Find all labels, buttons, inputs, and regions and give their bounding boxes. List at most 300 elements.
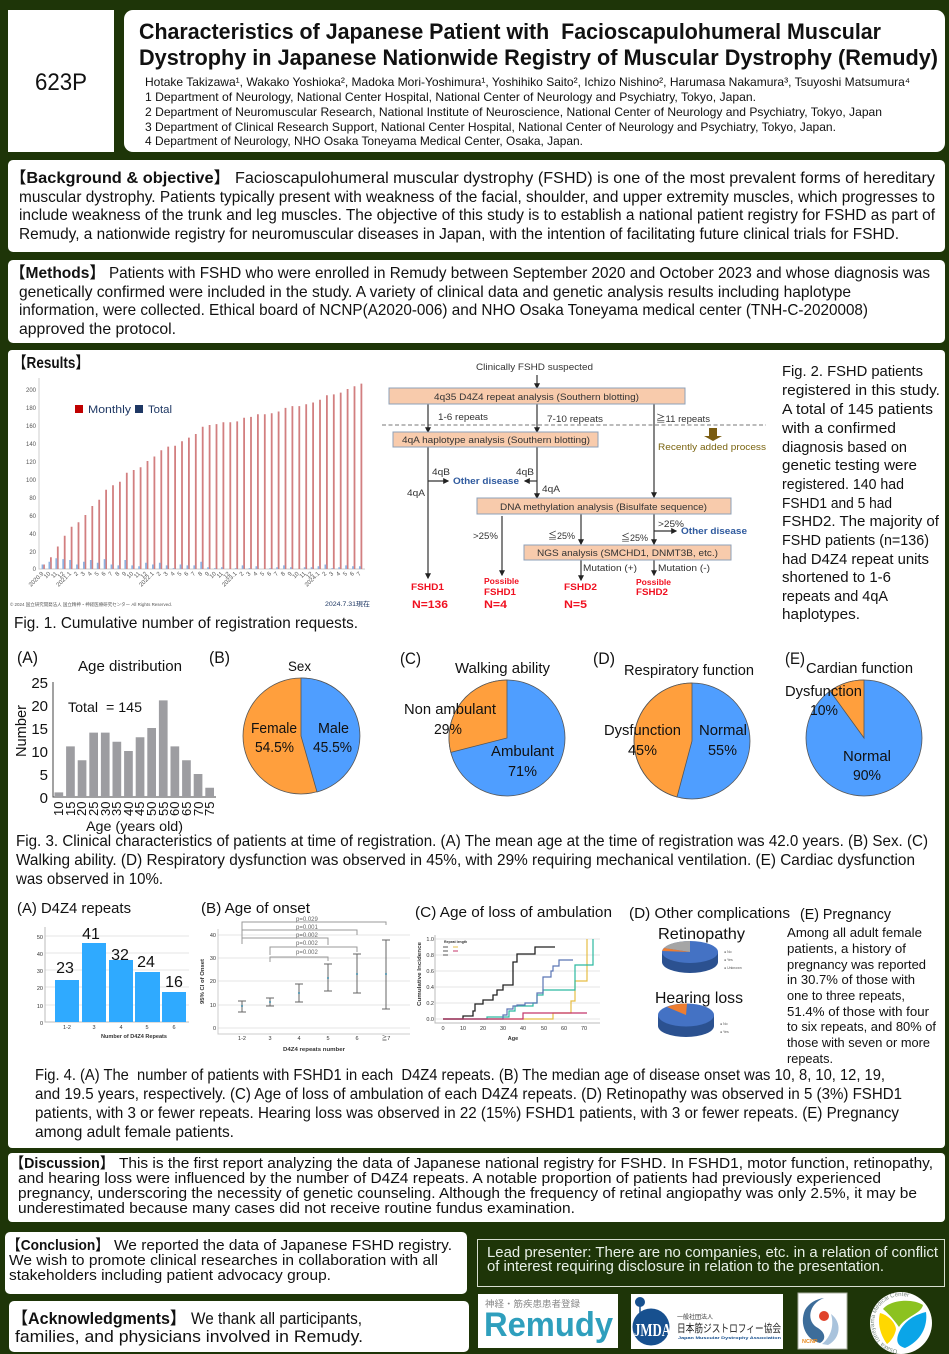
flowchart: diagnosis: 4qB [516, 467, 534, 478]
fig 3D: respiratory function pie: 55% [708, 742, 737, 759]
fig 4B: age of onset error bars: p=0.002 [296, 941, 319, 947]
figure 2 caption: FSHD patients (n=136) [782, 532, 929, 549]
figure 2 caption: A total of 145 patients [782, 401, 933, 418]
fig 4C: loss of ambulation curves: 0.4 [426, 985, 434, 991]
fig 4C: loss of ambulation curves: 40 [520, 1026, 526, 1032]
fig 4B: age of onset error bars: 6 [355, 1036, 359, 1042]
fig 4E: pregnancy text: repeats. [787, 1051, 833, 1066]
fig 4B: age of onset error bars: 10 [210, 1003, 216, 1009]
fig 3A: age distribution: 55 [156, 802, 171, 816]
panel: discussion: This is the first report analyzing the data of Japanese national registry for FSHD. In FSHD1, motor function, retinopathy, [119, 1155, 933, 1172]
fig 3A: age distribution [13, 648, 217, 834]
figure 4 caption: among adult female patients. [35, 1124, 234, 1141]
fig 4B: age of onset error bars: 1-2 [238, 1036, 246, 1042]
title: Dystrophy in Japanese Nationwide Registry of Muscular Dystrophy (Remudy) [139, 45, 938, 70]
fig 3E: cardiac function pie: 90% [853, 767, 881, 784]
fig 4D: other complications: (D) Other complications [629, 905, 790, 922]
flowchart: diagnosis: ≦25% [621, 532, 649, 544]
fig 3A: age distribution: 25 [86, 802, 101, 816]
fig 4B: age of onset error bars [200, 900, 410, 1053]
fig 4B: age of onset error bars: 30 [210, 956, 216, 962]
flowchart: diagnosis: ≦25% [548, 530, 576, 542]
fig 4E: pregnancy text: in 30.7% of those with [787, 972, 915, 987]
retinopathy 3D pie: Retinopathy [658, 926, 745, 943]
figure 4 caption: patients, with 3 or fewer repeats. Hearing loss was observed in 22 (15%) FSHD1 patients, with 3 or fewer repeats. (E) Pregnancy [35, 1105, 899, 1122]
panel: conflict of interest: Lead presenter: There are no companies, etc. in a relation of conflict [487, 1244, 939, 1261]
panel: conflict of interest [478, 1240, 944, 1286]
chart: cumulative registrations: 2 [322, 571, 329, 578]
chart: cumulative registrations: 3 [246, 571, 253, 578]
affiliations: 1 Department of Neurology, National Center Hospital, National Center of Neurology and Psychiatry, Tokyo, Japan. [145, 90, 756, 104]
hearing loss 3D pie: Hearing loss [655, 990, 743, 1007]
chart: cumulative registrations: 5 [260, 571, 267, 578]
fig 3A: age distribution: 0 [40, 790, 48, 807]
panel: conclusion [5, 1232, 467, 1294]
fig 3D: respiratory function pie [593, 649, 754, 799]
fig 4E: pregnancy text: those with seven or more [787, 1035, 930, 1050]
panel: acknowledgments: families, and physicians involved in Remudy. [15, 1327, 363, 1346]
flowchart: diagnosis: >25% [473, 531, 499, 542]
fig 3B: sex pie: 54.5% [255, 739, 294, 756]
panel: conclusion: 【Conclusion】 [7, 1237, 109, 1254]
logo: Osaka Toneyama Medical Center: Osaka Toneyama Medical Center [870, 1292, 910, 1354]
flowchart: diagnosis [382, 362, 766, 611]
fig 3A: age distribution: 50 [144, 802, 159, 816]
chart: cumulative registrations: 8 [115, 571, 122, 578]
fig 4A: D4Z4 repeats bar chart [17, 900, 189, 1040]
logo: Remudy: 神経・筋疾患患者登録 [485, 1298, 580, 1309]
chart: cumulative registrations: 20 [29, 550, 37, 556]
fig 3A: age distribution: 25 [31, 675, 48, 692]
flowchart: diagnosis: Other disease [681, 526, 747, 537]
figure 2 caption: FSHD2. The majority of [782, 513, 940, 530]
fig 3B: sex pie: (B) [209, 648, 230, 667]
fig 3A: age distribution: (A) [17, 648, 38, 667]
fig 4C: loss of ambulation curves: 1.0 [426, 937, 434, 943]
figure 2 caption: diagnosis based on [782, 439, 907, 456]
figure 2 caption: with a confirmed [781, 420, 896, 437]
logo: Osaka Toneyama Medical Center [870, 1292, 932, 1354]
chart: cumulative registrations: 5 [177, 571, 184, 578]
panel: methods: 【Methods】 [10, 264, 105, 282]
flowchart: diagnosis: FSHD2 [636, 587, 668, 598]
fig 3A: age distribution: 10 [31, 744, 48, 761]
fig 3E: cardiac function pie [785, 649, 922, 796]
chart: cumulative registrations: 12 [57, 571, 67, 580]
retinopathy 3D pie: ● No [724, 950, 732, 954]
fig 4C: loss of ambulation curves [415, 904, 612, 1042]
flowchart: diagnosis: Mutation (-) [658, 563, 710, 574]
legend: Total [148, 404, 172, 416]
chart: cumulative registrations: 4 [87, 571, 94, 578]
fig 4C: loss of ambulation curves: 50 [541, 1026, 547, 1032]
fig 3D: respiratory function pie: Dysfunction [604, 722, 681, 739]
logo: JMDA [631, 1294, 783, 1349]
fig 3B: sex pie: Female [251, 720, 297, 737]
panel: acknowledgments: We thank all participants, [191, 1309, 362, 1328]
logo: JMDA: 一般社団法人 [677, 1313, 713, 1321]
panel: discussion [8, 1153, 945, 1222]
figure 2 caption: repeats and 4qA [782, 588, 888, 605]
fig 4B: age of onset error bars: 5 [326, 1036, 330, 1042]
fig 4A: D4Z4 repeats bar chart: 23 [56, 960, 74, 977]
fig 4A: D4Z4 repeats bar chart: 50 [37, 935, 43, 941]
chart: cumulative registrations: 40 [29, 532, 37, 538]
figure 2 caption: FSHD1 and 5 had [782, 495, 892, 512]
chart: cumulative registrations: 2 [239, 571, 246, 578]
fig 3B: sex pie [209, 648, 360, 794]
hearing loss 3D pie: ● Yes [720, 1030, 729, 1034]
fig 4B: age of onset error bars: 3 [268, 1036, 272, 1042]
fig 4E: pregnancy text: patients, a history of [787, 941, 906, 956]
affiliations: 3 Department of Clinical Research Support, National Center Hospital, National Center of Neurology and Psychiatry, Tokyo, Japan. [145, 120, 836, 134]
fig 3B: sex pie: 45.5% [313, 739, 352, 756]
fig 3E: cardiac function pie: (E) [785, 649, 805, 668]
fig 4A: D4Z4 repeats bar chart: 20 [37, 986, 43, 992]
flowchart: diagnosis: 4qB [432, 467, 450, 478]
fig 3C: walking ability pie: Walking ability [455, 660, 550, 677]
flowchart: diagnosis: N=5 [564, 599, 587, 611]
retinopathy 3D pie [658, 926, 745, 973]
chart: cumulative registrations: 11 [51, 571, 60, 580]
chart: cumulative registrations: 2024.1 [304, 571, 322, 588]
panel: background and objective: 【Background & objective】 [10, 169, 230, 187]
fig 3A: age distribution: 45 [132, 802, 147, 816]
figure 4 caption [35, 1067, 902, 1141]
flowchart: diagnosis: FSHD2 [564, 582, 597, 593]
affiliations [145, 90, 882, 148]
flowchart: diagnosis: FSHD1 [411, 582, 445, 593]
chart: cumulative registrations: 100 [26, 478, 37, 484]
fig 3D: respiratory function pie: Respiratory function [624, 662, 754, 679]
chart: cumulative registrations: 2020.9 [28, 571, 46, 588]
panel: background and objective: Facioscapulohumeral muscular dystrophy (FSHD) is one of the most prevalent forms of hereditary [235, 170, 935, 187]
box: methylation analysis: DNA methylation analysis (Bisulfate sequence) [500, 502, 707, 513]
fig 3A: age distribution: Total = 145 [68, 699, 142, 715]
fig 3A: age distribution: 75 [202, 802, 217, 816]
fig 4A: D4Z4 repeats bar chart: 0 [40, 1021, 43, 1027]
chart: cumulative registrations: 8 [280, 571, 287, 578]
fig 4B: age of onset error bars: p=0.001 [296, 925, 319, 931]
fig 4C: loss of ambulation curves: 0.2 [426, 1001, 434, 1007]
fig 4B: age of onset error bars: 0 [213, 1026, 216, 1032]
fig 3A: age distribution: 60 [167, 802, 182, 816]
fig 4E: pregnancy text: pregnancy was reported [787, 957, 926, 972]
chart: cumulative registrations: 2022.1 [139, 571, 156, 588]
figure 2 caption: genetic testing were [782, 457, 917, 474]
flowchart: diagnosis: N=4 [484, 599, 508, 611]
fig 4A: D4Z4 repeats bar chart: Number of D4Z4 Repeats [101, 1034, 167, 1040]
fig 4B: age of onset error bars: p=0.002 [296, 950, 319, 956]
fig 4A: D4Z4 repeats bar chart: 40 [37, 952, 43, 958]
fig 4A: D4Z4 repeats bar chart: 5 [145, 1025, 149, 1031]
title panel [124, 10, 945, 152]
logo: JMDA: 日本筋ジストロフィー協会 [677, 1321, 781, 1335]
fig 3E: cardiac function pie: Dysfunction [785, 683, 862, 700]
flowchart: diagnosis: >25% [658, 519, 685, 530]
retinopathy 3D pie: ● Unknown [724, 966, 742, 970]
figure 4 caption: and 19.5 years, respectively. (C) Age of loss of ambulation of each D4Z4 repeats. (D) Retinopathy was observed in 5 (3%) FSHD1 [35, 1086, 902, 1103]
fig 4B: age of onset error bars: 20 [210, 979, 216, 985]
fig 4A: D4Z4 repeats bar chart: 32 [111, 947, 129, 964]
fig 4B: age of onset error bars: 4 [297, 1036, 301, 1042]
fig 4E: pregnancy text: 51.4% of those with four [787, 1004, 930, 1019]
flowchart: diagnosis: 4qA [542, 484, 561, 495]
panel: acknowledgments [9, 1301, 469, 1352]
box: NGS analysis [524, 545, 731, 560]
chart: cumulative registrations: 140 [26, 442, 37, 448]
figure 4 caption: Fig. 4. (A) The number of patients with FSHD1 in each D4Z4 repeats. (B) The median age of disease onset was 10, 8, 10, 12, 19, [35, 1067, 885, 1084]
chart: cumulative registrations: 80 [29, 496, 37, 502]
figure 1 caption: Fig. 1. Cumulative number of registration requests. [14, 615, 358, 632]
figure 2 caption: registered in this study. [782, 382, 940, 399]
figure 2 caption: had D4Z4 repeat units [782, 551, 929, 568]
fig 4A: D4Z4 repeats bar chart: 1-2 [63, 1025, 71, 1031]
fig 4C: loss of ambulation curves: (C) Age of loss of ambulation [415, 904, 612, 921]
figure 2 caption: shortened to 1-6 [782, 569, 891, 586]
chart: cumulative registrations: 4 [253, 571, 260, 578]
fig 4C: loss of ambulation curves: 10 [460, 1026, 466, 1032]
fig 4C: loss of ambulation curves: 70 [581, 1026, 587, 1032]
title: Characteristics of Japanese Patient with Facioscapulohumeral Muscular [139, 19, 881, 44]
fig 3A: age distribution: 65 [179, 802, 194, 816]
fig 4C: loss of ambulation curves: 30 [500, 1026, 506, 1032]
chart: cumulative registrations: 9 [122, 571, 129, 578]
fig 4E: pregnancy text: Among all adult female [787, 925, 922, 940]
fig 3C: walking ability pie: Ambulant [491, 743, 555, 760]
chart: cumulative registrations: 5 [94, 571, 101, 578]
panel: conclusion: stakeholders including patient advocacy group. [9, 1267, 331, 1284]
chart: cumulative registrations: 5 [342, 571, 349, 578]
fig 3C: walking ability pie: 71% [508, 763, 537, 780]
chart: cumulative registrations: 2 [73, 571, 80, 578]
panel: background and objective: muscular dystrophy. Patients typically present with weakness of the facial, shoulder, and upper extremity muscles, which progresses to [19, 189, 935, 206]
fig 4C: loss of ambulation curves: 0 [441, 1026, 445, 1032]
fig 3D: respiratory function pie: 45% [628, 742, 657, 759]
fig 4E: pregnancy text: one to three repeats, [787, 988, 905, 1003]
chart: cumulative registrations: 6 [184, 571, 191, 578]
chart: cumulative registrations: 9 [287, 571, 294, 578]
panel: discussion: 【Discussion】 [10, 1155, 114, 1172]
fig 4C: loss of ambulation curves: 20 [480, 1026, 486, 1032]
fig 3A: age distribution: 15 [63, 802, 78, 816]
logo: JMDA: Japan Muscular Dystrophy Association [678, 1335, 782, 1340]
box: repeat analysis: 4q35 D4Z4 repeat analysis (Southern blotting) [434, 392, 639, 403]
fig 4C: loss of ambulation curves: 0.8 [426, 953, 434, 959]
figure 3 caption [15, 833, 928, 888]
chart: cumulative registrations: 9 [204, 571, 211, 578]
chart: cumulative registrations: 2021.1 [56, 571, 73, 588]
panel: background and objective: Remudy, a nationwide registry for neuromuscular diseases in Japan, with the intention of facilitating future clinical trials for FSHD. [19, 226, 899, 243]
fig 4B: age of onset error bars: D4Z4 repeats number [283, 1047, 345, 1053]
flowchart: diagnosis: Possible [484, 577, 520, 586]
fig 4A: D4Z4 repeats bar chart: 10 [37, 1004, 43, 1010]
figure 2 caption [781, 363, 940, 623]
affiliations: 4 Department of Neurology, NHO Osaka Toneyama Medical Center, Osaka, Japan. [145, 134, 583, 148]
chart: cumulative registrations: 3 [163, 571, 170, 578]
logo: Remudy [478, 1294, 618, 1348]
flowchart: diagnosis: 1-6 repeats [438, 412, 488, 423]
results heading: 【Results】 [13, 354, 89, 372]
fig 4C: loss of ambulation curves: Repeat length [444, 940, 467, 944]
flowchart: diagnosis: Other disease [453, 476, 519, 487]
legend: Monthly [88, 404, 132, 416]
panel: conflict of interest: of interest requiring disclosure in relation to the presentation. [487, 1258, 884, 1275]
fig 3E: cardiac function pie: Normal [843, 748, 891, 765]
fig 3A: age distribution: 30 [98, 802, 113, 816]
figure 2 caption: registered. 140 had [782, 476, 904, 493]
panel: conclusion: We reported the data of Japanese FSHD registry. [114, 1237, 452, 1254]
fig 4C: loss of ambulation curves: 0.6 [426, 969, 434, 975]
fig 3C: walking ability pie [400, 649, 565, 796]
chart: cumulative registrations: 7 [191, 571, 198, 578]
fig 4B: age of onset error bars: 40 [210, 933, 216, 939]
retinopathy 3D pie: ● Yes [724, 958, 733, 962]
panel: results [8, 350, 945, 1148]
chart: cumulative registrations: 2023.1 [221, 571, 239, 588]
hearing loss 3D pie: ● No [720, 1022, 728, 1026]
logo: JMDA: JMDA [634, 1320, 671, 1340]
logo: Remudy: Remudy [484, 1306, 613, 1344]
flowchart: diagnosis: N=136 [412, 599, 448, 611]
chart: cumulative registrations: 6 [267, 571, 274, 578]
flowchart: diagnosis: Recently added process [658, 442, 766, 453]
flowchart: diagnosis: 4qA [407, 488, 426, 499]
box: haplotype analysis [393, 432, 598, 447]
chart: cumulative registrations: 11 [133, 571, 142, 580]
chart: cumulative registrations: 180 [26, 406, 37, 412]
fig 4E: pregnancy text: to six repeats, and 80% of [787, 1019, 936, 1034]
panel: background and objective: include weakness of the trunk and leg muscles. The objective of this study is to establish a national patient registry for FSHD as part of [19, 207, 936, 224]
chart: cumulative registrations: 200 [26, 388, 37, 394]
panel: methods: information, were collected. Ethical board of NCNP(A2020-006) and NHO Osaka Toneyama medical center (TNH-C-2020008) [19, 302, 868, 319]
chart: cumulative registrations: 160 [26, 424, 37, 430]
fig 3A: age distribution: 20 [31, 698, 48, 715]
chart: cumulative registrations: 10 [209, 571, 218, 580]
fig 3E: cardiac function pie: Cardian function [806, 660, 913, 677]
chart: cumulative registrations: 4 [336, 571, 343, 578]
fig 4E: pregnancy text: (E) Pregnancy [800, 906, 891, 923]
fig 4E: pregnancy text [787, 906, 936, 1066]
panel: methods: Patients with FSHD who were enrolled in Remudy between September 2020 and October 2023 and whose diagnosis was [109, 265, 930, 282]
copyright note: © 2024 国立研究開発法人 国立精神・神経医療研究センター All Rights Reserved. [10, 601, 172, 608]
fig 3A: age distribution: 10 [51, 802, 66, 816]
fig 3A: age distribution: 15 [31, 721, 48, 738]
hearing loss 3D pie [655, 990, 743, 1037]
title [139, 19, 938, 70]
fig 3C: walking ability pie: 29% [434, 721, 462, 738]
flowchart: diagnosis: 7-10 repeats [547, 414, 603, 425]
fig 4C: loss of ambulation curves: 60 [561, 1026, 567, 1032]
flowchart: diagnosis: ≧11 repeats [656, 413, 710, 425]
flowchart: diagnosis: Clinically FSHD suspected [476, 362, 593, 373]
authors: Hotake Takizawa¹, Wakako Yoshioka², Madoka Mori-Yoshimura¹, Yoshihiko Saito², Ichizo Nishino², Harumasa Nakamura³, Tsuyoshi Matsumura⁴ [145, 75, 910, 89]
fig 3A: age distribution: Age (years old) [86, 818, 183, 834]
chart: cumulative registrations: 7 [108, 571, 115, 578]
panel: methods [8, 260, 945, 343]
chart: cumulative registrations: 0 [33, 567, 37, 573]
fig 3B: sex pie: Male [318, 720, 349, 737]
chart: cumulative registrations: 6 [101, 571, 108, 578]
flowchart: diagnosis: FSHD1 [484, 587, 517, 598]
chart: cumulative registrations: 8 [198, 571, 205, 578]
fig 4A: D4Z4 repeats bar chart: (A) D4Z4 repeats [17, 900, 131, 917]
fig 4B: age of onset error bars: p=0.002 [296, 933, 319, 939]
chart: cumulative registrations: 3 [329, 571, 336, 578]
chart: cumulative registrations: 7 [273, 571, 280, 578]
fig 4A: D4Z4 repeats bar chart: 24 [137, 954, 155, 971]
fig 4B: age of onset error bars: ≧7 [382, 1034, 390, 1042]
chart: cumulative registrations: 12 [306, 571, 315, 580]
panel: background and objective [8, 160, 945, 252]
figure 3 caption: Walking ability. (D) Respiratory dysfunction was observed in 45%, with 29% requiring mechanical ventilation. (E) Cardiac dysfunction [16, 852, 915, 869]
fig 4C: loss of ambulation curves: 0.0 [426, 1017, 434, 1023]
chart: cumulative registrations: 12 [140, 571, 149, 580]
fig 3E: cardiac function pie: 10% [810, 702, 838, 719]
chart: cumulative registrations: 10 [126, 571, 136, 580]
fig 3C: walking ability pie: (C) [400, 649, 421, 668]
fig 4A: D4Z4 repeats bar chart: 6 [172, 1025, 176, 1031]
fig 3A: age distribution: Number [13, 705, 30, 757]
legend [75, 404, 172, 416]
fig 3A: age distribution: Age distribution [78, 658, 182, 675]
fig 4A: D4Z4 repeats bar chart: 4 [119, 1025, 123, 1031]
box: NGS analysis: NGS analysis (SMCHD1, DNMT3B, etc.) [537, 548, 718, 559]
fig 3A: age distribution: 5 [40, 767, 48, 784]
date note: 2024.7.31現在 [325, 599, 371, 608]
panel: discussion: underestimated because many cases did not receive routine fundus examination. [18, 1200, 575, 1217]
fig 3C: walking ability pie: Non ambulant [404, 701, 497, 718]
flowchart: diagnosis: Mutation (+) [583, 563, 637, 574]
fig 4C: loss of ambulation curves: Cumulative Incidence [417, 942, 423, 1006]
chart: cumulative registrations: 3 [80, 571, 87, 578]
poster number: 623P [35, 69, 87, 96]
fig 4B: age of onset error bars: 95% CI of Onset [200, 959, 206, 1004]
panel: methods: genetically confirmed were included in the study. A variety of clinical data and genetic analysis results including haplotype [19, 284, 851, 301]
box: haplotype analysis: 4qA haplotype analysis (Southern blotting) [402, 435, 590, 446]
fig 4D: other complications [629, 905, 790, 1037]
logo: NCNP: NCNP [802, 1339, 818, 1345]
poster number [8, 10, 114, 152]
fig 4A: D4Z4 repeats bar chart: 3 [92, 1025, 96, 1031]
chart: cumulative registrations: 2 [156, 571, 163, 578]
chart: cumulative registrations: 6 [349, 571, 356, 578]
fig 3A: age distribution: 35 [109, 802, 124, 816]
fig 4A: D4Z4 repeats bar chart: 41 [82, 926, 100, 943]
fig 4B: age of onset error bars: p=0.029 [296, 917, 319, 923]
figure 2 caption: Fig. 2. FSHD patients [782, 363, 923, 380]
fig 4C: loss of ambulation curves: Age [508, 1036, 518, 1042]
box: methylation analysis [477, 498, 731, 514]
logo: NCNP [798, 1293, 847, 1349]
figure 2 caption: haplotypes. [782, 606, 860, 623]
fig 3A: age distribution: 70 [191, 802, 206, 816]
panel: discussion: and hearing loss were influenced by the number of D4Z4 repeats. A notable proportion of patients had previously experienced [18, 1170, 881, 1187]
chart: cumulative registrations: 11 [299, 571, 308, 580]
fig 3D: respiratory function pie: (D) [593, 649, 615, 668]
chart: cumulative registrations: 120 [26, 460, 37, 466]
fig 4B: age of onset error bars: (B) Age of onset [201, 900, 311, 917]
fig 4A: D4Z4 repeats bar chart: 16 [165, 974, 183, 991]
panel: conclusion: We wish to promote clinical researches in collaboration with all [9, 1252, 438, 1269]
affiliations: 2 Department of Neuromuscular Research, National Institute of Neuroscience, National Center of Neurology and Psychiatry, Tokyo, Japan [145, 105, 882, 119]
chart: cumulative registrations: 12 [223, 571, 232, 580]
fig 3A: age distribution: 20 [74, 802, 89, 816]
fig 3D: respiratory function pie: Normal [699, 722, 747, 739]
panel: discussion: pregnancy, underscoring the necessity of genetic counseling. Although the frequency of retinal angiopathy was only 2.5%, it may be [18, 1185, 917, 1202]
chart: cumulative registrations: 11 [216, 571, 225, 580]
panel: methods: approved the protocol. [19, 321, 176, 338]
